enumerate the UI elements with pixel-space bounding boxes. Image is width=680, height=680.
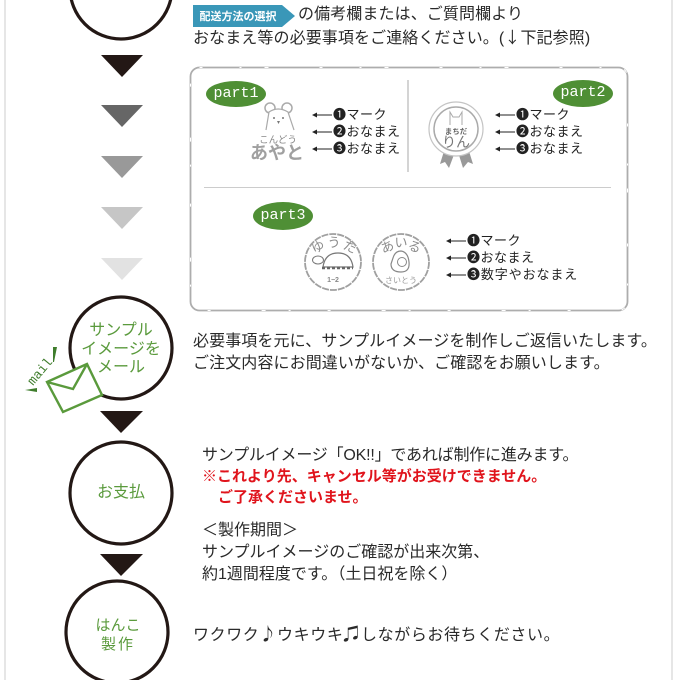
badge: part3: [253, 202, 313, 230]
intro text: おなまえ等の必要事項をご連絡ください。(↓下記参照): [193, 24, 590, 48]
arrow 2: [101, 105, 143, 127]
labels: part2: ❶マーク: [516, 107, 570, 122]
text: cancel warning: ご了承くださいませ。: [218, 488, 368, 506]
intro text: [193, 5, 590, 48]
intro text: の備考欄または、ご質問欄より: [298, 6, 523, 23]
labels: part2: [495, 107, 584, 156]
labels: part3: ❷おなまえ: [467, 250, 535, 265]
text: cancel warning: ※これより先、キャンセル等がお受けできません。: [202, 468, 546, 485]
labels: part2: ❷おなまえ: [516, 124, 584, 139]
text: production period: [202, 522, 489, 584]
icon: mail envelope: [25, 347, 104, 414]
arrow 7: [100, 554, 143, 576]
stamp: bird: る: [406, 237, 423, 256]
badge: part1: part1: [213, 85, 258, 102]
arrow 6: [100, 411, 143, 433]
shipping method tag: 配送方法の選択: [200, 9, 276, 23]
stamp: turtle: た: [341, 237, 359, 256]
step circle 4: [66, 581, 168, 680]
badge: part3: part3: [260, 207, 306, 224]
arrow 1: [101, 55, 143, 77]
text: OK notice: サンプルイメージ「OK!!」であれば制作に進みます。: [202, 447, 578, 464]
stamp: turtle: 1−2: [327, 277, 339, 284]
stamp: bird: あ: [379, 237, 396, 256]
stamp: bird: い: [394, 235, 408, 250]
labels: part3: ❸数字やおなまえ: [467, 267, 578, 282]
stamp: turtle: ゆ: [309, 237, 327, 256]
labels: part3: [446, 233, 578, 282]
text: production period: 約1週間程度です。（土日祝を除く）: [202, 560, 457, 584]
panel dividers: [204, 80, 611, 188]
step label: stamp production: [95, 617, 140, 652]
text: production period: サンプルイメージのご確認が出来次第、: [202, 544, 489, 561]
badge: part1: [206, 81, 266, 107]
labels: part1: ❸おなまえ: [333, 141, 401, 156]
step circle 2: [70, 297, 172, 399]
arrow 5: [101, 258, 143, 280]
arrow 3: [101, 156, 143, 178]
labels: part1: ❷おなまえ: [333, 124, 401, 139]
step circle 3: [70, 442, 172, 544]
stamp: rabbit medal: まちだ: [445, 127, 468, 136]
text: cancel warning: [202, 468, 546, 506]
stamp: bear: こんどう: [259, 135, 297, 146]
arrow 4: [101, 207, 143, 229]
labels: part3: ❶マーク: [467, 233, 521, 248]
stamp: turtle: [304, 233, 362, 291]
step circle 1: [70, 0, 172, 39]
badge: part2: part2: [560, 84, 606, 101]
stamp: bear: あやと: [250, 143, 304, 163]
text: production period: ＜製作期間＞: [202, 522, 298, 539]
labels: part1: [312, 107, 401, 156]
step label: sample image mail: [81, 322, 161, 376]
stamp: bird: さいとう: [385, 276, 417, 285]
step label: sample image mail: メール: [97, 359, 145, 376]
stamp: turtle: う: [327, 235, 341, 250]
stamp: rabbit medal: [428, 101, 484, 168]
icon: mail envelope: mail: [25, 355, 56, 389]
step label: stamp production: 製作: [101, 636, 135, 652]
labels: part2: ❸おなまえ: [516, 141, 584, 156]
stamp: bear: [250, 102, 304, 163]
step label: sample image mail: イメージを: [81, 340, 161, 358]
shipping method tag: [193, 5, 295, 27]
text: sample image: 必要事項を元に、サンプルイメージを制作しご返信いたします。: [193, 333, 657, 350]
text: closing: ワクワク♪ウキウキ♫しながらお待ちください。: [193, 620, 560, 645]
panel: stamp parts: [190, 66, 628, 312]
badge: part2: [553, 80, 613, 107]
step label: stamp production: はんこ: [95, 617, 140, 634]
text: sample image: [193, 332, 657, 372]
step label: sample image mail: サンプル: [89, 322, 153, 339]
step label: payment: お支払: [97, 484, 145, 501]
text: sample image: ご注文内容にお間違いがないか、ご確認をお願いします。: [193, 355, 610, 372]
stamp: bird: [372, 233, 430, 291]
stamp: rabbit medal: りん: [442, 134, 470, 150]
labels: part1: ❶マーク: [333, 107, 387, 122]
